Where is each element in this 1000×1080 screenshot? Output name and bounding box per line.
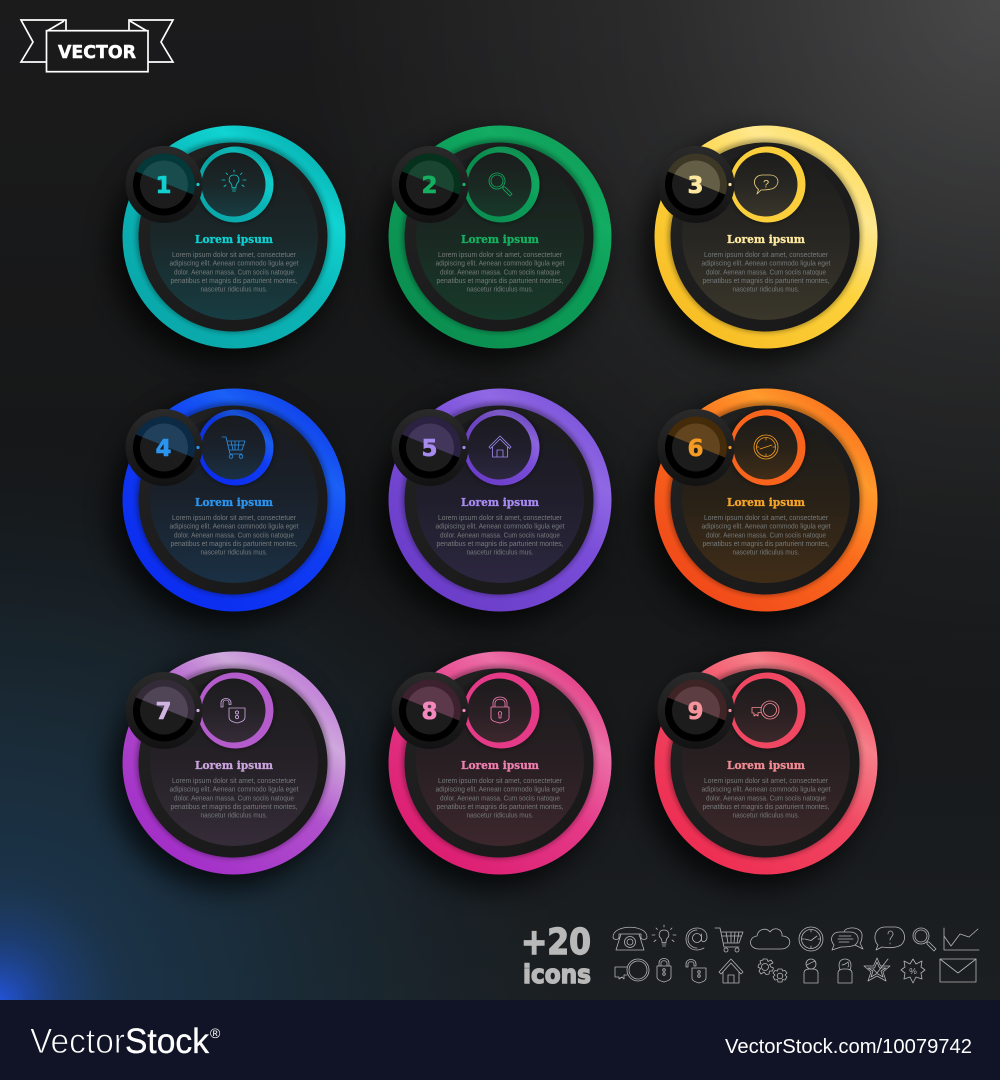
text block 8: adipiscing elit. Aenean commodo ligula eget — [436, 787, 565, 794]
icon: at sign — [686, 928, 707, 950]
icon set: +20 outline icons — [613, 925, 979, 983]
text block 3 — [702, 252, 831, 294]
icon: star with check — [864, 958, 890, 981]
number badge 6 — [658, 409, 734, 486]
icon ring 1 — [197, 146, 274, 223]
text block 1 — [170, 252, 299, 294]
text block 4: penatibus et magnis dis parturient montes, — [170, 541, 298, 548]
icon: lock — [657, 958, 671, 982]
text block 1: Lorem ipsum dolor sit amet, consectetuer — [172, 252, 297, 259]
icon ring 5 — [463, 409, 540, 486]
icon: light bulb — [222, 170, 246, 191]
icon: percent burst — [901, 959, 925, 983]
text block 8: penatibus et magnis dis parturient montes, — [436, 804, 564, 811]
text block 8: Lorem ipsum dolor sit amet, consectetuer — [438, 778, 563, 785]
image id text: VectorStock.com/10079742 — [725, 1036, 972, 1058]
text block 6: penatibus et magnis dis parturient montes, — [702, 541, 830, 548]
number badge 6: 6 — [687, 436, 704, 462]
heading 1: Lorem ipsum — [195, 232, 273, 246]
text block 5: nascetur ridiculus mus. — [466, 550, 534, 557]
heading 7: Lorem ipsum — [195, 758, 273, 772]
number badge 2 — [392, 146, 468, 223]
footer band — [0, 1000, 1000, 1080]
icon ring 8 — [463, 672, 540, 749]
icon: house — [489, 436, 511, 457]
number badge 8: 8 — [421, 699, 438, 725]
text block 3: penatibus et magnis dis parturient montes, — [702, 278, 830, 285]
text block 2: adipiscing elit. Aenean commodo ligula eget — [436, 261, 565, 268]
logo: VectorStock: ® — [210, 1025, 221, 1041]
icon ring 3 — [729, 146, 806, 223]
number badge 1 — [126, 146, 202, 223]
text block 9: nascetur ridiculus mus. — [732, 813, 800, 820]
text block 2: penatibus et magnis dis parturient montes, — [436, 278, 564, 285]
panel: circle 4 — [110, 388, 346, 626]
text block 6: Lorem ipsum dolor sit amet, consectetuer — [704, 515, 829, 522]
icon ring 4 — [197, 409, 274, 486]
logo: VectorStock: Vector — [30, 1022, 125, 1061]
text block 4: dolor. Aenean massa. Cum sociis natoque — [174, 532, 294, 539]
text block 8: nascetur ridiculus mus. — [466, 813, 534, 820]
heading 4: Lorem ipsum — [195, 495, 273, 509]
heading: +20 icons: +20 — [521, 922, 591, 963]
text block 2: dolor. Aenean massa. Cum sociis natoque — [440, 269, 560, 276]
icon: open lock — [686, 960, 706, 983]
icon: man — [804, 959, 818, 983]
heading 6: Lorem ipsum — [727, 495, 805, 509]
number badge 3 — [658, 146, 734, 223]
panel: circle 2 — [376, 126, 612, 363]
number badge 3: 3 — [687, 173, 704, 199]
text block 3: dolor. Aenean massa. Cum sociis natoque — [706, 269, 826, 276]
text block 6: dolor. Aenean massa. Cum sociis natoque — [706, 532, 826, 539]
number badge 5: 5 — [421, 436, 438, 462]
heading 8: Lorem ipsum — [461, 758, 539, 772]
text block 3: Lorem ipsum dolor sit amet, consectetuer — [704, 252, 829, 259]
text block 1: adipiscing elit. Aenean commodo ligula eget — [170, 261, 299, 268]
icon: woman — [838, 959, 852, 983]
number badge 7: 7 — [155, 699, 172, 725]
text block 2: nascetur ridiculus mus. — [466, 287, 534, 294]
number badge 5 — [392, 409, 468, 486]
panel: circle 3 — [642, 126, 878, 363]
logo: VectorStock: Stock — [125, 1022, 209, 1061]
number badge 9 — [658, 672, 734, 749]
text block 8 — [436, 778, 565, 820]
icon: shopping cart — [715, 928, 743, 952]
logo: VectorStock — [30, 1022, 221, 1061]
text block 5: Lorem ipsum dolor sit amet, consectetuer — [438, 515, 563, 522]
text block 7: Lorem ipsum dolor sit amet, consectetuer — [172, 778, 297, 785]
text block 2: Lorem ipsum dolor sit amet, consectetuer — [438, 252, 563, 259]
text block 6: adipiscing elit. Aenean commodo ligula eget — [702, 524, 831, 531]
text block 1: nascetur ridiculus mus. — [200, 287, 268, 294]
icon: clock — [754, 435, 778, 459]
heading 3: Lorem ipsum — [727, 232, 805, 246]
badge: VECTOR ribbon: VECTOR — [58, 42, 136, 63]
icon: magnifier — [913, 928, 936, 951]
text block 5 — [436, 515, 565, 557]
icon: speech bubbles — [832, 928, 863, 950]
panel: circle 8 — [376, 652, 612, 889]
text block 5: adipiscing elit. Aenean commodo ligula eget — [436, 524, 565, 531]
heading 2: Lorem ipsum — [461, 232, 539, 246]
icon ring 6 — [729, 409, 806, 486]
text block 7: dolor. Aenean massa. Cum sociis natoque — [174, 795, 294, 802]
text block 7 — [170, 778, 299, 820]
icon: house — [719, 959, 743, 983]
icon: percent burst: % — [909, 966, 917, 976]
text block 4: nascetur ridiculus mus. — [200, 550, 268, 557]
icon: closed lock — [491, 697, 509, 723]
text block 9: penatibus et magnis dis parturient montes, — [702, 804, 830, 811]
text block 7: nascetur ridiculus mus. — [200, 813, 268, 820]
text block 3: nascetur ridiculus mus. — [732, 287, 800, 294]
icon: question bubble — [754, 175, 778, 194]
text block 4: Lorem ipsum dolor sit amet, consectetuer — [172, 515, 297, 522]
icon: key — [752, 701, 779, 719]
text block 7: adipiscing elit. Aenean commodo ligula eget — [170, 787, 299, 794]
text block 6: nascetur ridiculus mus. — [732, 550, 800, 557]
text block 9: adipiscing elit. Aenean commodo ligula eget — [702, 787, 831, 794]
number badge 1: 1 — [155, 173, 172, 199]
icon: key — [615, 959, 649, 981]
text block 7: penatibus et magnis dis parturient montes, — [170, 804, 298, 811]
text block 4 — [170, 515, 299, 557]
icon: magnifier — [489, 173, 512, 196]
icon: telephone — [613, 927, 647, 950]
heading: +20 icons — [521, 922, 591, 990]
icon: cloud — [750, 929, 790, 949]
text block 4: adipiscing elit. Aenean commodo ligula eget — [170, 524, 299, 531]
text block 9: dolor. Aenean massa. Cum sociis natoque — [706, 795, 826, 802]
icon: gears — [758, 959, 787, 982]
text block 3: adipiscing elit. Aenean commodo ligula eget — [702, 261, 831, 268]
number badge 4 — [126, 409, 202, 486]
number badge 4: 4 — [155, 436, 172, 462]
panel: circle 1 — [110, 126, 346, 363]
icon: question bubble: ? — [763, 178, 769, 190]
icon: clock — [799, 927, 823, 951]
icon: question bubble — [875, 927, 905, 950]
heading: +20 icons: icons — [523, 960, 591, 990]
text block 1: dolor. Aenean massa. Cum sociis natoque — [174, 269, 294, 276]
number badge 2: 2 — [421, 173, 438, 199]
text block 2 — [436, 252, 565, 294]
icon ring 9 — [729, 672, 806, 749]
text block 6 — [702, 515, 831, 557]
panel: circle 7 — [110, 652, 346, 889]
text block 9: Lorem ipsum dolor sit amet, consectetuer — [704, 778, 829, 785]
icon: cart — [222, 437, 245, 458]
heading 9: Lorem ipsum — [727, 758, 805, 772]
badge: VECTOR ribbon — [21, 20, 173, 72]
panel: circle 5 — [376, 388, 612, 626]
icon ring 2 — [463, 146, 540, 223]
number badge 8 — [392, 672, 468, 749]
icon: open lock — [221, 698, 245, 723]
number badge 7 — [126, 672, 202, 749]
text block 5: dolor. Aenean massa. Cum sociis natoque — [440, 532, 560, 539]
text block 8: dolor. Aenean massa. Cum sociis natoque — [440, 795, 560, 802]
icon: bulb — [652, 925, 676, 946]
panel: circle 9 — [642, 652, 878, 889]
icon: line chart — [944, 928, 979, 950]
heading 5: Lorem ipsum — [461, 495, 539, 509]
text block 9 — [702, 778, 831, 820]
panel: circle 6 — [642, 388, 878, 626]
icon: envelope — [940, 959, 976, 982]
icon ring 7 — [197, 672, 274, 749]
number badge 9: 9 — [687, 699, 704, 725]
text block 1: penatibus et magnis dis parturient montes, — [170, 278, 298, 285]
text block 5: penatibus et magnis dis parturient montes, — [436, 541, 564, 548]
